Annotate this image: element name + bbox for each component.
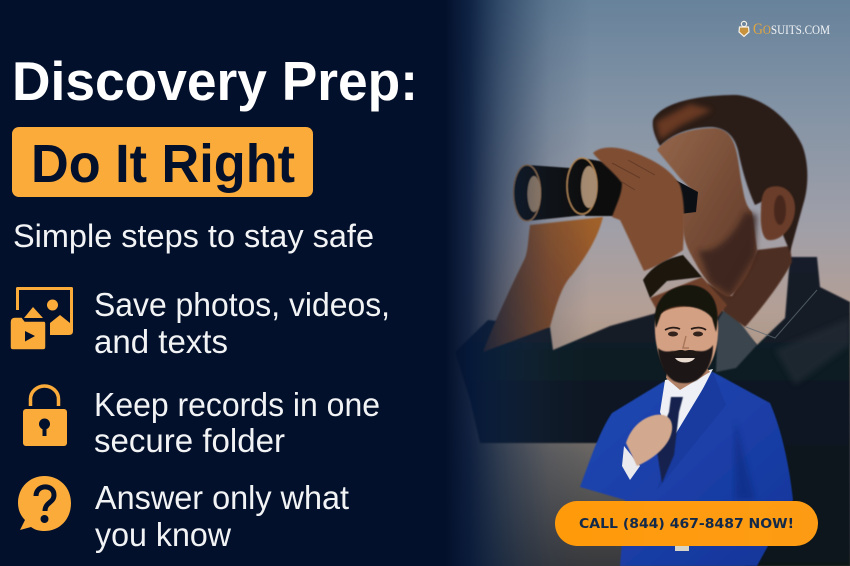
right forearm <box>650 277 727 340</box>
ear shadow <box>774 195 786 225</box>
binocular eyepiece <box>672 178 698 214</box>
highlight badge <box>12 127 313 197</box>
nose shading <box>683 336 689 348</box>
title: Discovery Prep: <box>12 50 418 112</box>
suit fold shading <box>735 420 755 500</box>
face <box>655 307 718 368</box>
moustache <box>669 350 700 357</box>
lens one glass <box>528 176 540 212</box>
brows <box>665 328 706 330</box>
smile <box>675 358 695 362</box>
jacket chest detail <box>775 318 850 385</box>
jacket <box>455 257 850 566</box>
watch <box>675 546 689 551</box>
sky backdrop <box>446 0 850 566</box>
button shape <box>555 501 818 546</box>
right hand <box>593 147 684 271</box>
icon: question bubble <box>18 476 71 531</box>
binoculars <box>514 158 628 221</box>
lawyer portrait <box>580 285 793 566</box>
item text: secure folder <box>94 422 285 459</box>
logo <box>739 21 830 38</box>
shirt <box>660 369 713 445</box>
beard <box>698 212 757 295</box>
logo icon <box>739 21 749 36</box>
badge background <box>12 127 313 197</box>
list item: save evidence <box>10 286 390 360</box>
icon: padlock <box>23 386 67 446</box>
hair <box>653 95 807 252</box>
item text: and texts <box>94 323 228 360</box>
left fade overlay <box>445 0 590 566</box>
lapel <box>657 372 726 490</box>
jacket sheen <box>716 305 757 372</box>
suit <box>580 372 793 566</box>
wristband <box>643 255 702 298</box>
badge text: Do It Right <box>31 134 295 194</box>
barrel two <box>582 158 628 216</box>
hair <box>655 285 718 332</box>
neck <box>707 246 792 327</box>
item text: Keep records in one <box>94 386 380 423</box>
jacket collar seam <box>746 290 817 338</box>
list item: secure records <box>23 386 380 459</box>
icon: photo and video <box>10 288 72 350</box>
hand on tie <box>626 415 672 466</box>
list item: answer honestly <box>18 476 349 553</box>
beard <box>658 345 713 383</box>
ear <box>761 186 795 240</box>
logo wordmark: GOSUITS.COM <box>753 21 830 38</box>
barrel one <box>527 165 585 221</box>
reddish hair highlight <box>656 104 712 140</box>
neck <box>666 365 710 390</box>
cuff <box>622 446 640 480</box>
item text: Answer only what <box>95 479 349 516</box>
right hand finger shading <box>612 160 655 190</box>
button label: CALL (844) 467-8487 NOW! <box>579 516 794 532</box>
face <box>657 128 757 297</box>
lens two rim <box>567 158 597 214</box>
call to action button <box>555 501 818 546</box>
item text: Save photos, videos, <box>94 286 390 323</box>
subtitle: Simple steps to stay safe <box>13 218 374 254</box>
lens one rim <box>514 165 540 221</box>
item text: you know <box>95 516 231 553</box>
tie <box>656 397 683 483</box>
eyes <box>668 332 678 336</box>
photo: man looking through binoculars <box>446 0 850 566</box>
lens two glass <box>581 166 597 208</box>
left forearm and hand <box>483 217 603 352</box>
